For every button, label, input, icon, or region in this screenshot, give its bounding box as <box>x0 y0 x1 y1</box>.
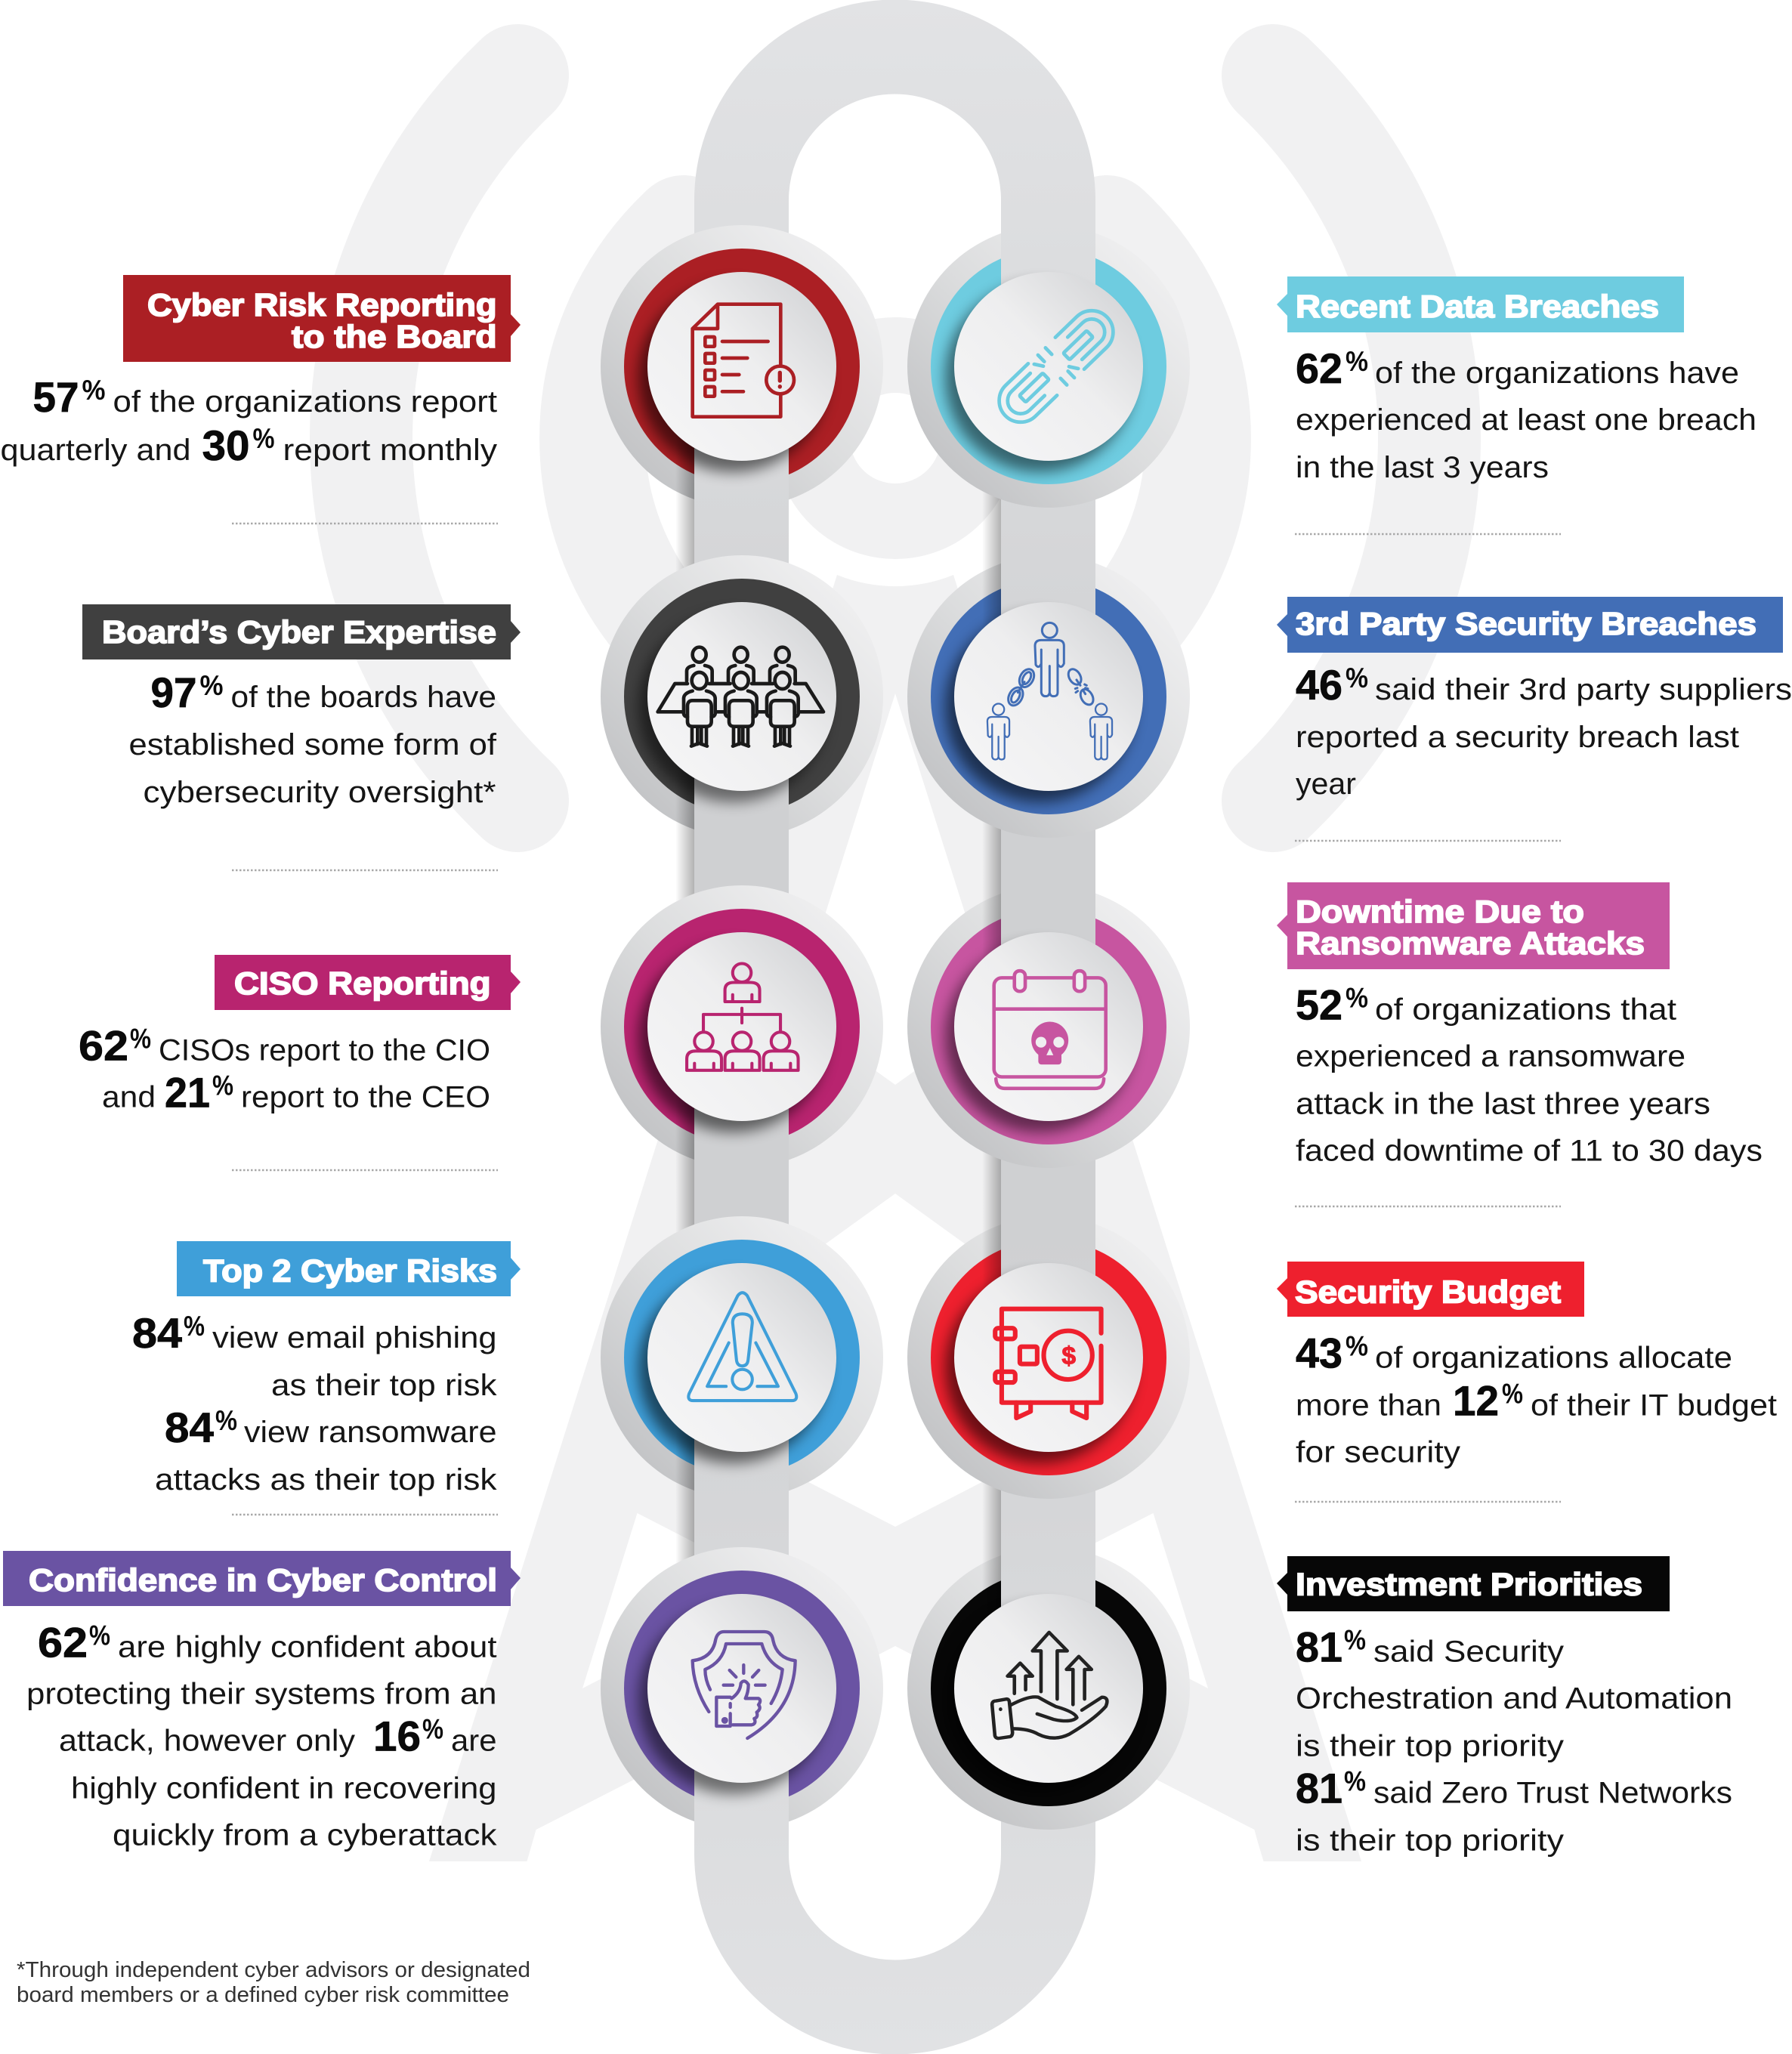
heading banner: confidence <box>3 1551 521 1606</box>
medallion: board expertise <box>601 555 882 900</box>
heading banner: cyber risk reporting: to the Board <box>292 319 497 354</box>
text: risk stats: 84 <box>132 1309 182 1357</box>
panel: investment priorities <box>1277 1556 1732 1857</box>
medallion: ransomware downtime <box>907 823 1190 1162</box>
text: investment stats <box>1296 1623 1732 1857</box>
panel: top 2 cyber risks <box>132 1241 521 1515</box>
text: budget stats: 43 <box>1296 1330 1342 1376</box>
heading banner: downtime: Ransomware Attacks <box>1296 925 1645 961</box>
heading banner: investment <box>1277 1556 1670 1611</box>
medallion: security budget <box>907 1153 1189 1499</box>
text: CISO stats: CISOs report to the CIO <box>159 1033 490 1067</box>
heading banner: recent breaches: Recent Data Breaches <box>1296 289 1659 324</box>
text: board stats: % <box>199 670 224 701</box>
text: investment stats: % <box>1344 1766 1366 1796</box>
heading banner: recent breaches <box>1277 276 1684 332</box>
heading banner: CISO reporting <box>215 955 521 1010</box>
text: risk stats <box>132 1309 498 1496</box>
medallion: CISO reporting <box>601 885 883 1231</box>
text: confidence stats: 16 <box>373 1712 421 1760</box>
text: risk stats: % <box>184 1311 205 1342</box>
panel: board's cyber expertise <box>82 604 521 870</box>
text: third party stats: % <box>1346 663 1368 693</box>
heading banner: downtime <box>1277 882 1670 969</box>
text: budget stats: of their IT budget <box>1531 1388 1777 1422</box>
text: confidence stats <box>26 1618 498 1852</box>
text: investment stats: said Security <box>1373 1635 1564 1668</box>
text: third party stats: 46 <box>1296 661 1342 709</box>
icon: boardroom table <box>658 647 823 746</box>
heading banner: security budget: Security Budget <box>1295 1274 1561 1310</box>
text: budget stats: 12 <box>1453 1376 1499 1425</box>
icon: calendar with skull <box>994 971 1106 1089</box>
text: CISO stats <box>79 1021 490 1117</box>
text: investment stats: % <box>1344 1624 1366 1656</box>
panel: CISO reporting <box>79 955 521 1170</box>
text: downtime stats: 52 <box>1296 981 1342 1029</box>
right chain column <box>907 200 1190 1830</box>
text: confidence stats: attack, however only <box>59 1724 355 1757</box>
text: CISO stats: and <box>102 1080 156 1113</box>
text: third party stats: year <box>1296 768 1356 801</box>
text: investment stats: 81 <box>1296 1623 1342 1671</box>
text: confidence stats: % <box>89 1620 110 1651</box>
text: breach stats <box>1296 344 1756 484</box>
text: third party stats <box>1296 661 1792 801</box>
text: CISO stats: report to the CEO <box>241 1080 490 1113</box>
text: reporting stats: 57 <box>33 373 79 421</box>
text: CISO stats: 62 <box>79 1021 128 1070</box>
text: CISO stats: % <box>130 1023 151 1055</box>
icon: safe with dollar <box>995 1309 1101 1418</box>
icon: report document with alert <box>693 304 794 417</box>
text: breach stats: in the last 3 years <box>1296 451 1549 484</box>
text: third party stats: said their 3rd party suppliers <box>1375 673 1792 706</box>
text: reporting stats: % <box>252 423 275 454</box>
heading banner: top risks <box>177 1241 521 1296</box>
text: third party stats: reported a security breach last <box>1296 721 1739 754</box>
text: risk stats: % <box>215 1405 237 1436</box>
text: breach stats: of the organizations have <box>1375 357 1739 390</box>
text: risk stats: view ransomware <box>244 1416 497 1449</box>
heading banner: security budget <box>1277 1262 1584 1317</box>
icon: shield with thumbs up <box>693 1632 796 1738</box>
footnote: *Through independent cyber advisors or designated <box>17 1958 530 1982</box>
heading banner: board expertise <box>82 604 521 659</box>
text: downtime stats: faced downtime of 11 to 30 days <box>1296 1135 1763 1168</box>
text: confidence stats: quickly from a cyberattack <box>113 1819 498 1852</box>
medallion: top cyber risks <box>601 1216 883 1562</box>
icon: hand with rising arrows <box>992 1632 1107 1738</box>
text: confidence stats: highly confident in recovering <box>71 1772 497 1805</box>
chain loop: top and bottom arcs <box>742 47 1049 2007</box>
panel: cyber risk reporting <box>0 275 521 524</box>
icon: safe with dollar: $ <box>1061 1342 1076 1370</box>
heading banner: board expertise: Board’s Cyber Expertise <box>102 614 496 650</box>
heading banner: CISO reporting: CISO Reporting <box>234 965 491 1001</box>
text: confidence stats: % <box>422 1713 443 1745</box>
icon: org chart <box>687 964 799 1070</box>
text: investment stats: 81 <box>1296 1765 1342 1812</box>
panel: third party security breaches <box>1277 597 1792 841</box>
text: board stats: established some form of <box>128 728 497 761</box>
text: downtime stats: % <box>1346 982 1368 1014</box>
text: risk stats: attacks as their top risk <box>155 1463 498 1496</box>
footnote: board members or a defined cyber risk committee <box>17 1983 509 2007</box>
icon: broken chain link <box>990 301 1122 431</box>
text: reporting stats: 30 <box>202 422 249 469</box>
heading banner: third party: 3rd Party Security Breaches <box>1296 606 1756 641</box>
text: board stats: of the boards have <box>231 681 496 714</box>
footnote <box>17 1958 530 2007</box>
text: board stats <box>128 669 497 809</box>
text: reporting stats: quarterly and <box>0 434 190 467</box>
text: budget stats: of organizations allocate <box>1375 1342 1732 1375</box>
icon: warning triangle <box>688 1293 796 1401</box>
medallion: board reporting <box>601 225 882 570</box>
text: investment stats: is their top priority <box>1296 1730 1564 1763</box>
text: downtime stats: attack in the last three years <box>1296 1088 1710 1121</box>
text: CISO stats: 21 <box>165 1068 210 1117</box>
left chain column <box>601 225 883 1855</box>
text: confidence stats: are <box>451 1724 497 1757</box>
text: downtime stats: experienced a ransomware <box>1296 1039 1685 1073</box>
text: reporting stats: of the organizations report <box>113 385 497 419</box>
text: risk stats: as their top risk <box>271 1369 498 1402</box>
heading banner: investment: Investment Priorities <box>1296 1567 1642 1602</box>
text: CISO stats: % <box>212 1070 233 1101</box>
text: board stats: cybersecurity oversight* <box>144 776 496 809</box>
medallion: recent data breaches <box>907 233 1189 508</box>
text: risk stats: view email phishing <box>212 1321 497 1354</box>
medallion: confidence in control <box>601 1547 883 1822</box>
heading banner: cyber risk reporting <box>123 275 521 362</box>
medallion: third party breaches <box>907 493 1190 832</box>
text: budget stats: more than <box>1296 1388 1441 1422</box>
text: budget stats <box>1296 1330 1777 1469</box>
text: investment stats: is their top priority <box>1296 1824 1564 1857</box>
text: budget stats: for security <box>1296 1435 1460 1469</box>
panel: downtime due to ransomware <box>1277 882 1763 1206</box>
text: confidence stats: protecting their systems from an <box>26 1677 497 1710</box>
text: budget stats: % <box>1346 1331 1368 1361</box>
text: confidence stats: 62 <box>38 1618 88 1666</box>
panel: confidence in cyber control <box>3 1551 521 1852</box>
text: reporting stats <box>0 373 497 469</box>
heading banner: cyber risk reporting: Cyber Risk Reporting <box>147 287 497 323</box>
heading banner: downtime: Downtime Due to <box>1296 894 1584 929</box>
text: investment stats: said Zero Trust Networks <box>1373 1777 1732 1810</box>
heading banner: top risks: Top 2 Cyber Risks <box>203 1252 497 1289</box>
text: confidence stats: are highly confident about <box>118 1630 497 1663</box>
panel: security budget <box>1277 1262 1777 1502</box>
text: reporting stats: % <box>82 375 106 406</box>
icon: supplier chain <box>987 622 1112 759</box>
heading banner: third party <box>1277 597 1783 653</box>
text: investment stats: Orchestration and Automation <box>1296 1682 1732 1715</box>
text: risk stats: 84 <box>165 1404 214 1451</box>
text: breach stats: experienced at least one breach <box>1296 403 1756 437</box>
medallion: investment priorities <box>907 1484 1189 1830</box>
panel: recent data breaches <box>1277 276 1756 534</box>
text: reporting stats: report monthly <box>283 434 497 467</box>
text: downtime stats: of organizations that <box>1375 993 1676 1026</box>
text: breach stats: 62 <box>1296 344 1342 392</box>
text: breach stats: % <box>1346 346 1368 377</box>
text: board stats: 97 <box>151 669 196 716</box>
text: budget stats: % <box>1502 1378 1523 1410</box>
text: downtime stats <box>1296 981 1763 1168</box>
heading banner: confidence: Confidence in Cyber Control <box>29 1562 497 1598</box>
